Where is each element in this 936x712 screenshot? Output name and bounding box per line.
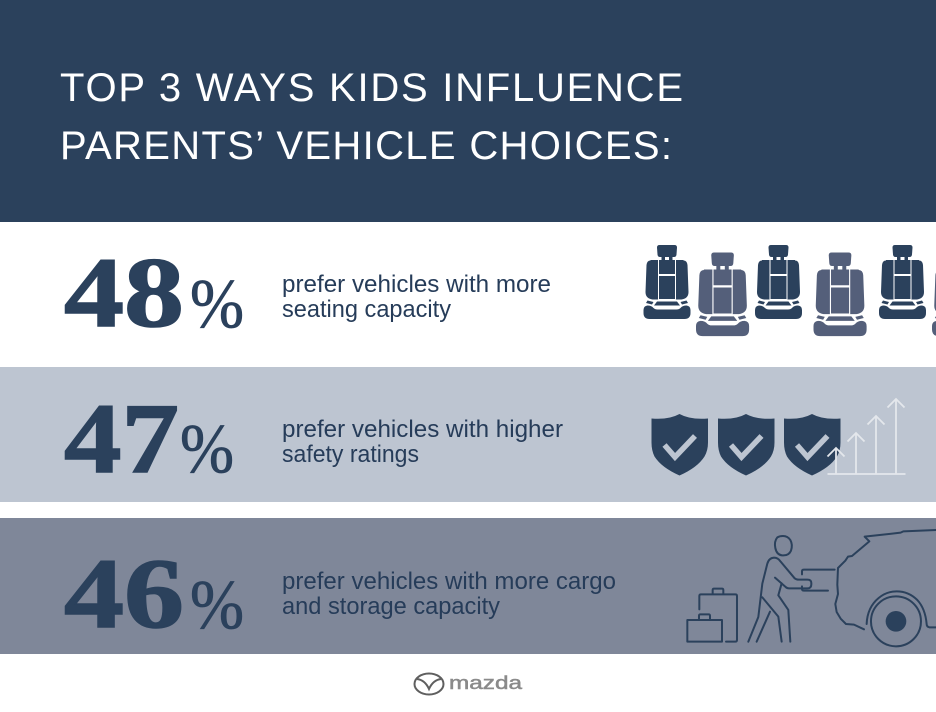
icon: suitcases [687,589,737,642]
description: seating: seating capacity [282,296,452,323]
icon: person loading car [687,530,936,646]
panel: safety ratings [0,367,936,502]
stat: 46 percent: 46 [64,538,184,649]
icon: person [748,536,835,642]
header panel [0,0,936,222]
panel: cargo and storage [0,518,936,654]
title: PARENTS’ VEHICLE CHOICES: [60,124,672,168]
title [60,66,683,168]
icon: mazda emblem [414,674,444,694]
description: safety: prefer vehicles with higher [282,416,563,443]
wordmark: mazda [449,673,523,693]
stat: 48 percent [64,237,244,348]
description: cargo [282,568,616,620]
description: seating [282,271,551,323]
stat: 47 percent [64,383,234,494]
logo: mazda [414,673,523,694]
description: seating: prefer vehicles with more [282,271,551,298]
panel: seating capacity [0,222,936,367]
icon: rising arrows [828,399,906,474]
stat: 46 percent [64,538,244,649]
stat: 46 percent: % [190,567,244,644]
description: safety: safety ratings [282,441,419,468]
stat: 48 percent: % [190,266,244,343]
icon: car outline [835,530,936,646]
description: safety [282,416,563,468]
stat: 48 percent: 48 [64,237,184,348]
description: cargo: and storage capacity [282,593,501,620]
stat: 47 percent: % [180,411,234,488]
icon: shields [652,414,840,476]
description: cargo: prefer vehicles with more cargo [282,568,616,595]
icon: car seats [644,245,936,336]
stat: 47 percent: 47 [64,383,179,494]
title: TOP 3 WAYS KIDS INFLUENCE [60,66,683,110]
